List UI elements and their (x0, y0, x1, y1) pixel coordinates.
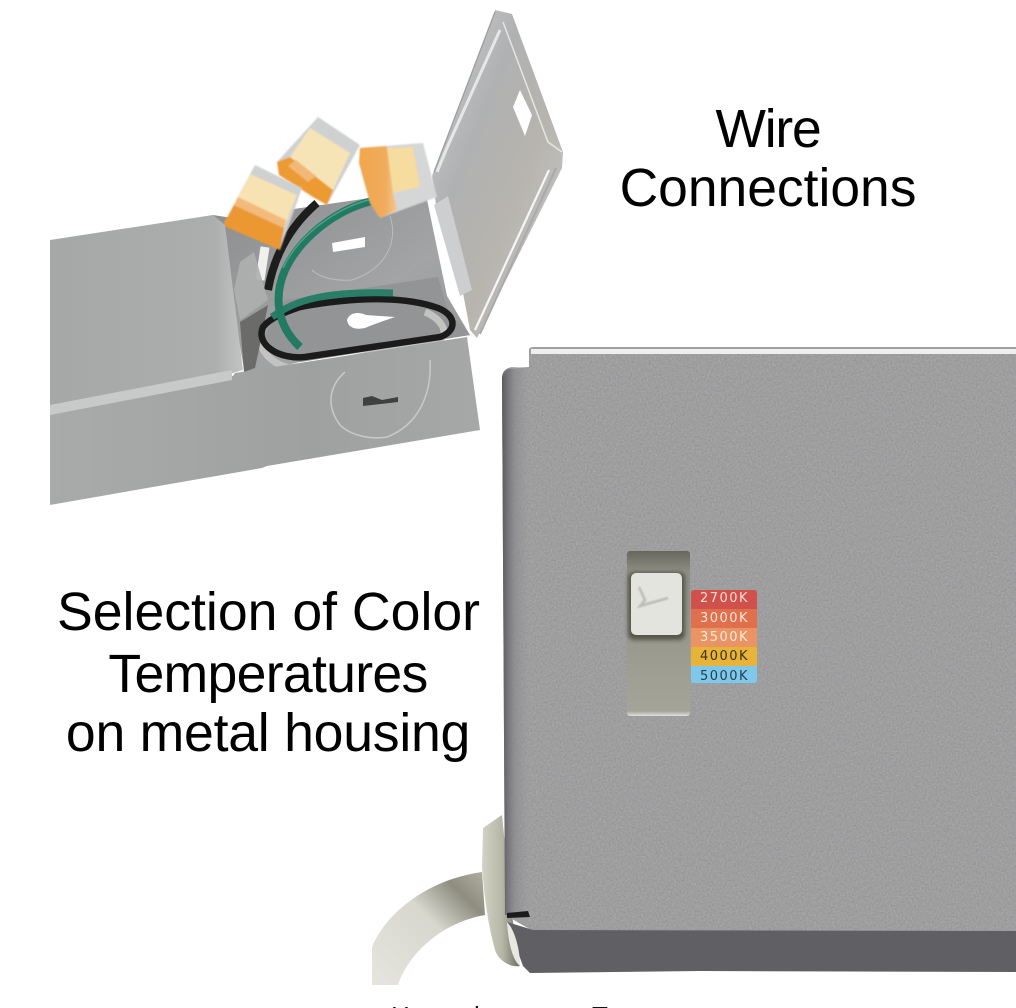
switch slot (627, 551, 690, 716)
photo: open junction box with wire connectors (50, 10, 563, 505)
heading: wire connections: Wire (716, 100, 820, 159)
black wire upper (268, 203, 317, 290)
box interior wall (213, 190, 470, 375)
housing face (502, 354, 1016, 931)
label 3000K: 3000K (700, 611, 749, 626)
heading: connections line: Connections (620, 159, 916, 218)
green wire 1 (279, 201, 372, 347)
corner slit (507, 911, 530, 918)
black wire loop (261, 299, 452, 357)
label 4000K: 4000K (700, 649, 749, 664)
small bracket (234, 252, 268, 320)
heading: selection of color temperatures: Selection of Color (57, 582, 480, 642)
strain relief (482, 815, 520, 966)
photo: metal housing (502, 347, 1016, 973)
label 5000K: 5000K (700, 669, 749, 684)
cover fold highlight (50, 370, 232, 415)
grey cable loop (258, 312, 444, 369)
white wire (260, 247, 265, 280)
white cable (372, 872, 485, 985)
green wire 2 (272, 293, 393, 317)
connector 3 (359, 143, 437, 218)
label 3500K: 3500K (700, 630, 749, 645)
switch knob (628, 572, 685, 640)
photo: power cable and strain relief (372, 815, 520, 985)
heading: selection of color temperatures: on metal housing (66, 703, 470, 763)
knockout openings (312, 216, 395, 329)
connector 2 (277, 117, 360, 205)
heading: selection of color temperatures (57, 582, 480, 763)
connector 1 (224, 165, 302, 250)
label 2700K: 2700K (700, 591, 749, 606)
top lip of housing (529, 347, 1016, 372)
housing shaded left edge (502, 367, 530, 915)
heading: selection of color temperatures: Temperatures (108, 644, 428, 704)
round knockout (331, 360, 430, 438)
corner tab (507, 922, 520, 966)
front face (50, 337, 480, 505)
housing bottom face (507, 922, 1016, 973)
color temperature switch (627, 551, 757, 716)
lid of junction box (432, 10, 563, 338)
metal cover (50, 215, 243, 410)
color temperature labels (691, 590, 757, 684)
